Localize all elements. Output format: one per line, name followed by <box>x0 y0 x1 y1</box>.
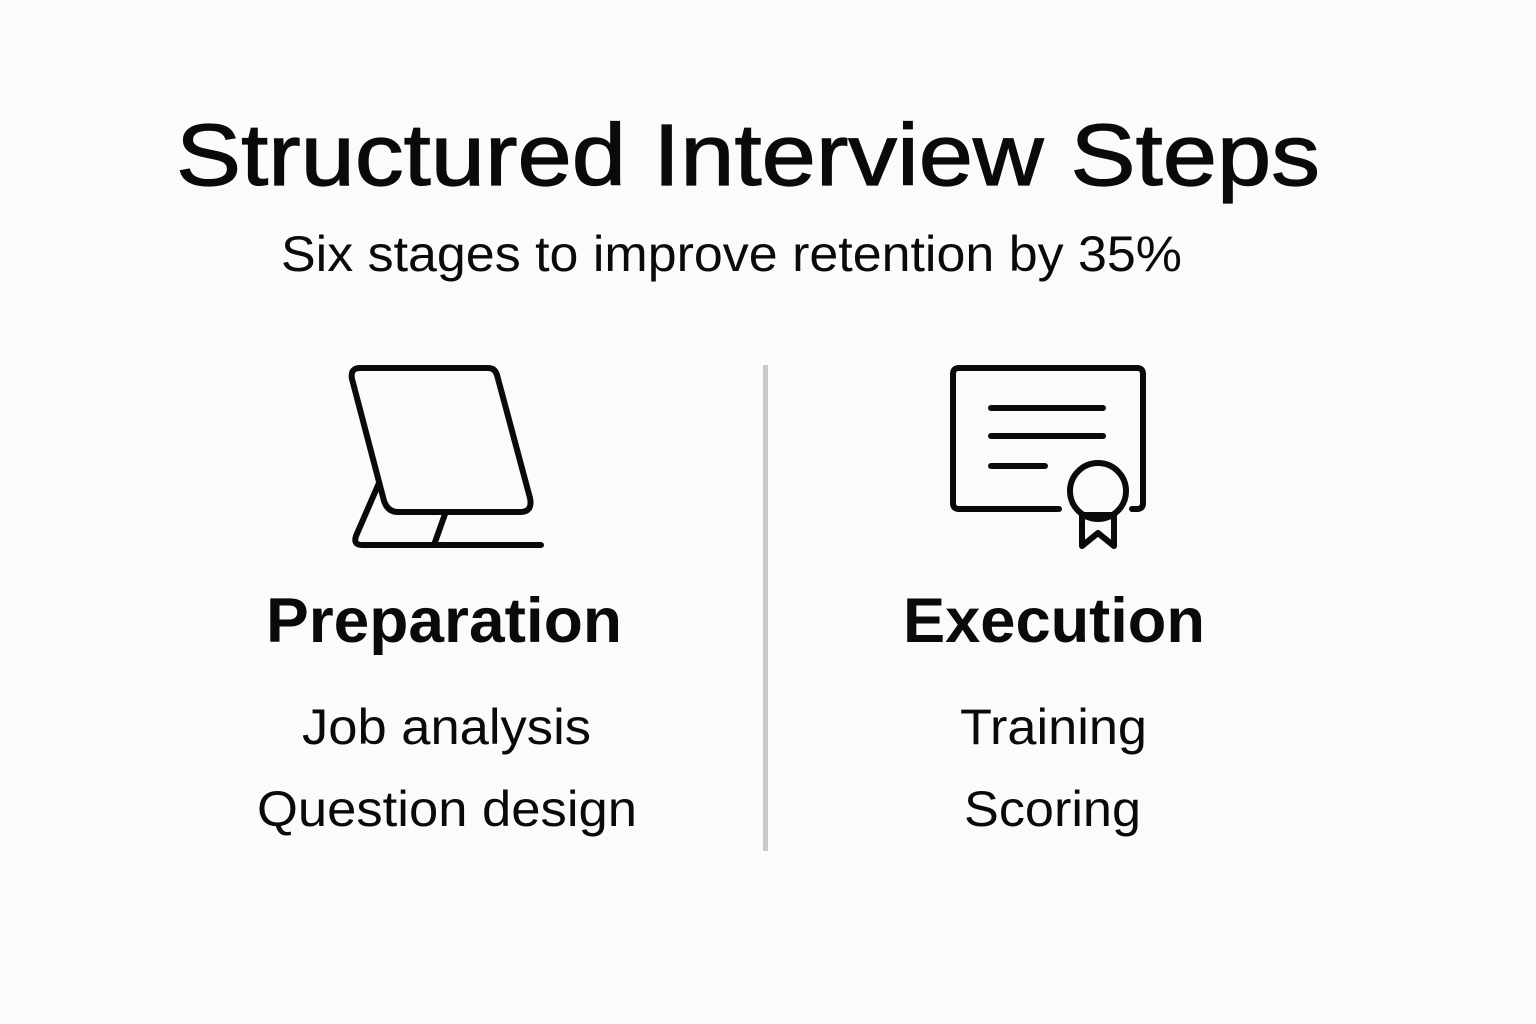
heading: execution: Execution <box>903 586 1205 656</box>
item: job analysis: Job analysis <box>302 699 591 755</box>
item: training: Training <box>960 699 1147 755</box>
item: scoring: Scoring <box>964 781 1141 837</box>
panel: execution <box>903 368 1205 837</box>
icon: certificate with ribbon <box>953 368 1143 546</box>
icon: tablet on stand <box>352 368 541 545</box>
subtitle: Six stages to improve retention by 35% <box>281 226 1182 282</box>
heading: preparation: Preparation <box>266 586 622 656</box>
panel: preparation <box>257 368 637 837</box>
title: Structured Interview Steps <box>176 107 1320 204</box>
item: question design: Question design <box>257 781 637 837</box>
divider <box>763 365 768 851</box>
